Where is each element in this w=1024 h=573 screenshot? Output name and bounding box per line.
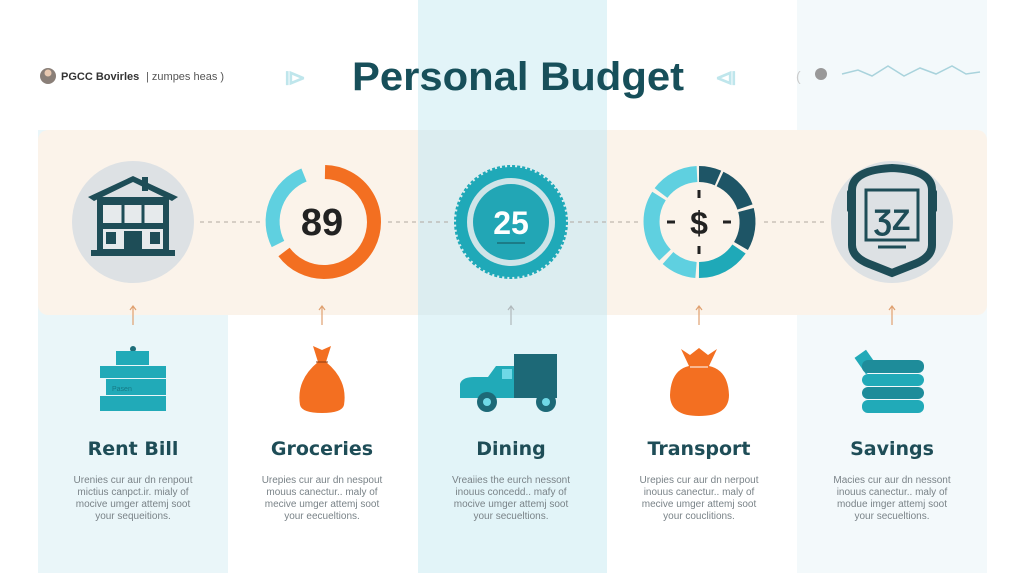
text: rent bill: mocive umger attemj soot bbox=[76, 499, 190, 510]
icon: shield circle bbox=[831, 161, 953, 283]
text: rent bill: mictius canpct.ir. mialy of bbox=[77, 487, 189, 498]
text: groceries: Urepies cur aur dn nespout bbox=[262, 475, 383, 486]
text: rent bill bbox=[74, 438, 193, 522]
icon: coin stack bbox=[855, 350, 924, 413]
text: dining: Dining bbox=[476, 438, 546, 460]
text: dining bbox=[452, 438, 570, 522]
chart: 25 badge bbox=[456, 167, 566, 277]
header left badge: | zumpes heas ) bbox=[146, 71, 224, 83]
text: savings: modue imger attemj soot bbox=[837, 499, 947, 510]
chart: 89 donut: 89 bbox=[301, 202, 343, 244]
text: rent bill: Rent Bill bbox=[88, 438, 178, 460]
text: savings: inouus canectur.. maly of bbox=[837, 487, 948, 498]
icon: left play mark: ⧐ bbox=[284, 65, 306, 90]
header right sparkline: ( bbox=[796, 68, 801, 84]
icon: truck bbox=[460, 354, 557, 412]
text: savings: Macies cur aur dn nessont bbox=[833, 475, 951, 486]
text: transport: your couclitions. bbox=[663, 511, 735, 522]
icon: bill stack bbox=[100, 346, 166, 411]
text: groceries: mouus canectur.. maly of bbox=[266, 487, 378, 498]
column texts bbox=[74, 438, 951, 522]
vertical arrows bbox=[130, 306, 895, 325]
text: transport: Transport bbox=[647, 438, 751, 460]
text: groceries: Groceries bbox=[271, 438, 373, 460]
title: Personal Budget bbox=[352, 55, 684, 99]
text: dollar: $ bbox=[690, 205, 708, 241]
text: dining: mocive umger attemj soot bbox=[454, 499, 568, 510]
chart: 25 badge: 25 bbox=[493, 205, 529, 241]
chart: 89 donut bbox=[273, 172, 374, 272]
text: dollar bbox=[667, 190, 731, 254]
icon: sack groceries bbox=[299, 346, 345, 413]
icon: right mark: ⧏ bbox=[715, 65, 737, 90]
text: savings bbox=[833, 438, 951, 522]
text: groceries bbox=[262, 438, 383, 522]
icon: house circle bbox=[72, 161, 194, 283]
icon: bill stack: Pasen bbox=[112, 386, 132, 393]
text: groceries: mecive umger attemj soot bbox=[265, 499, 379, 510]
text: rent bill: Urenies cur aur dn renpout bbox=[74, 475, 193, 486]
text: transport: mecive umger attemj soot bbox=[642, 499, 756, 510]
dashed connectors bbox=[200, 221, 826, 223]
text: savings: your secueltions. bbox=[854, 511, 930, 522]
header left badge: PGCC Bovirles bbox=[61, 71, 139, 83]
text: transport bbox=[640, 438, 759, 522]
text: rent bill: your sequeitions. bbox=[95, 511, 171, 522]
text: dining: Vreaiies the eurch nessont bbox=[452, 475, 570, 486]
text: transport: Urepies cur aur dn nerpout bbox=[640, 475, 759, 486]
text: savings: Savings bbox=[850, 438, 934, 460]
text: groceries: your eecueltions. bbox=[284, 511, 360, 522]
text: dining: your secueltions. bbox=[473, 511, 549, 522]
text: dining: inouus concedd.. mafy of bbox=[455, 487, 567, 498]
icon: shield circle: ƷZ bbox=[874, 204, 910, 237]
chart: dollar donut bbox=[652, 174, 747, 270]
header left badge bbox=[40, 68, 224, 84]
icon: sack transport bbox=[670, 348, 729, 416]
text: transport: inouus canectur.. maly of bbox=[644, 487, 755, 498]
header right sparkline bbox=[796, 66, 980, 84]
